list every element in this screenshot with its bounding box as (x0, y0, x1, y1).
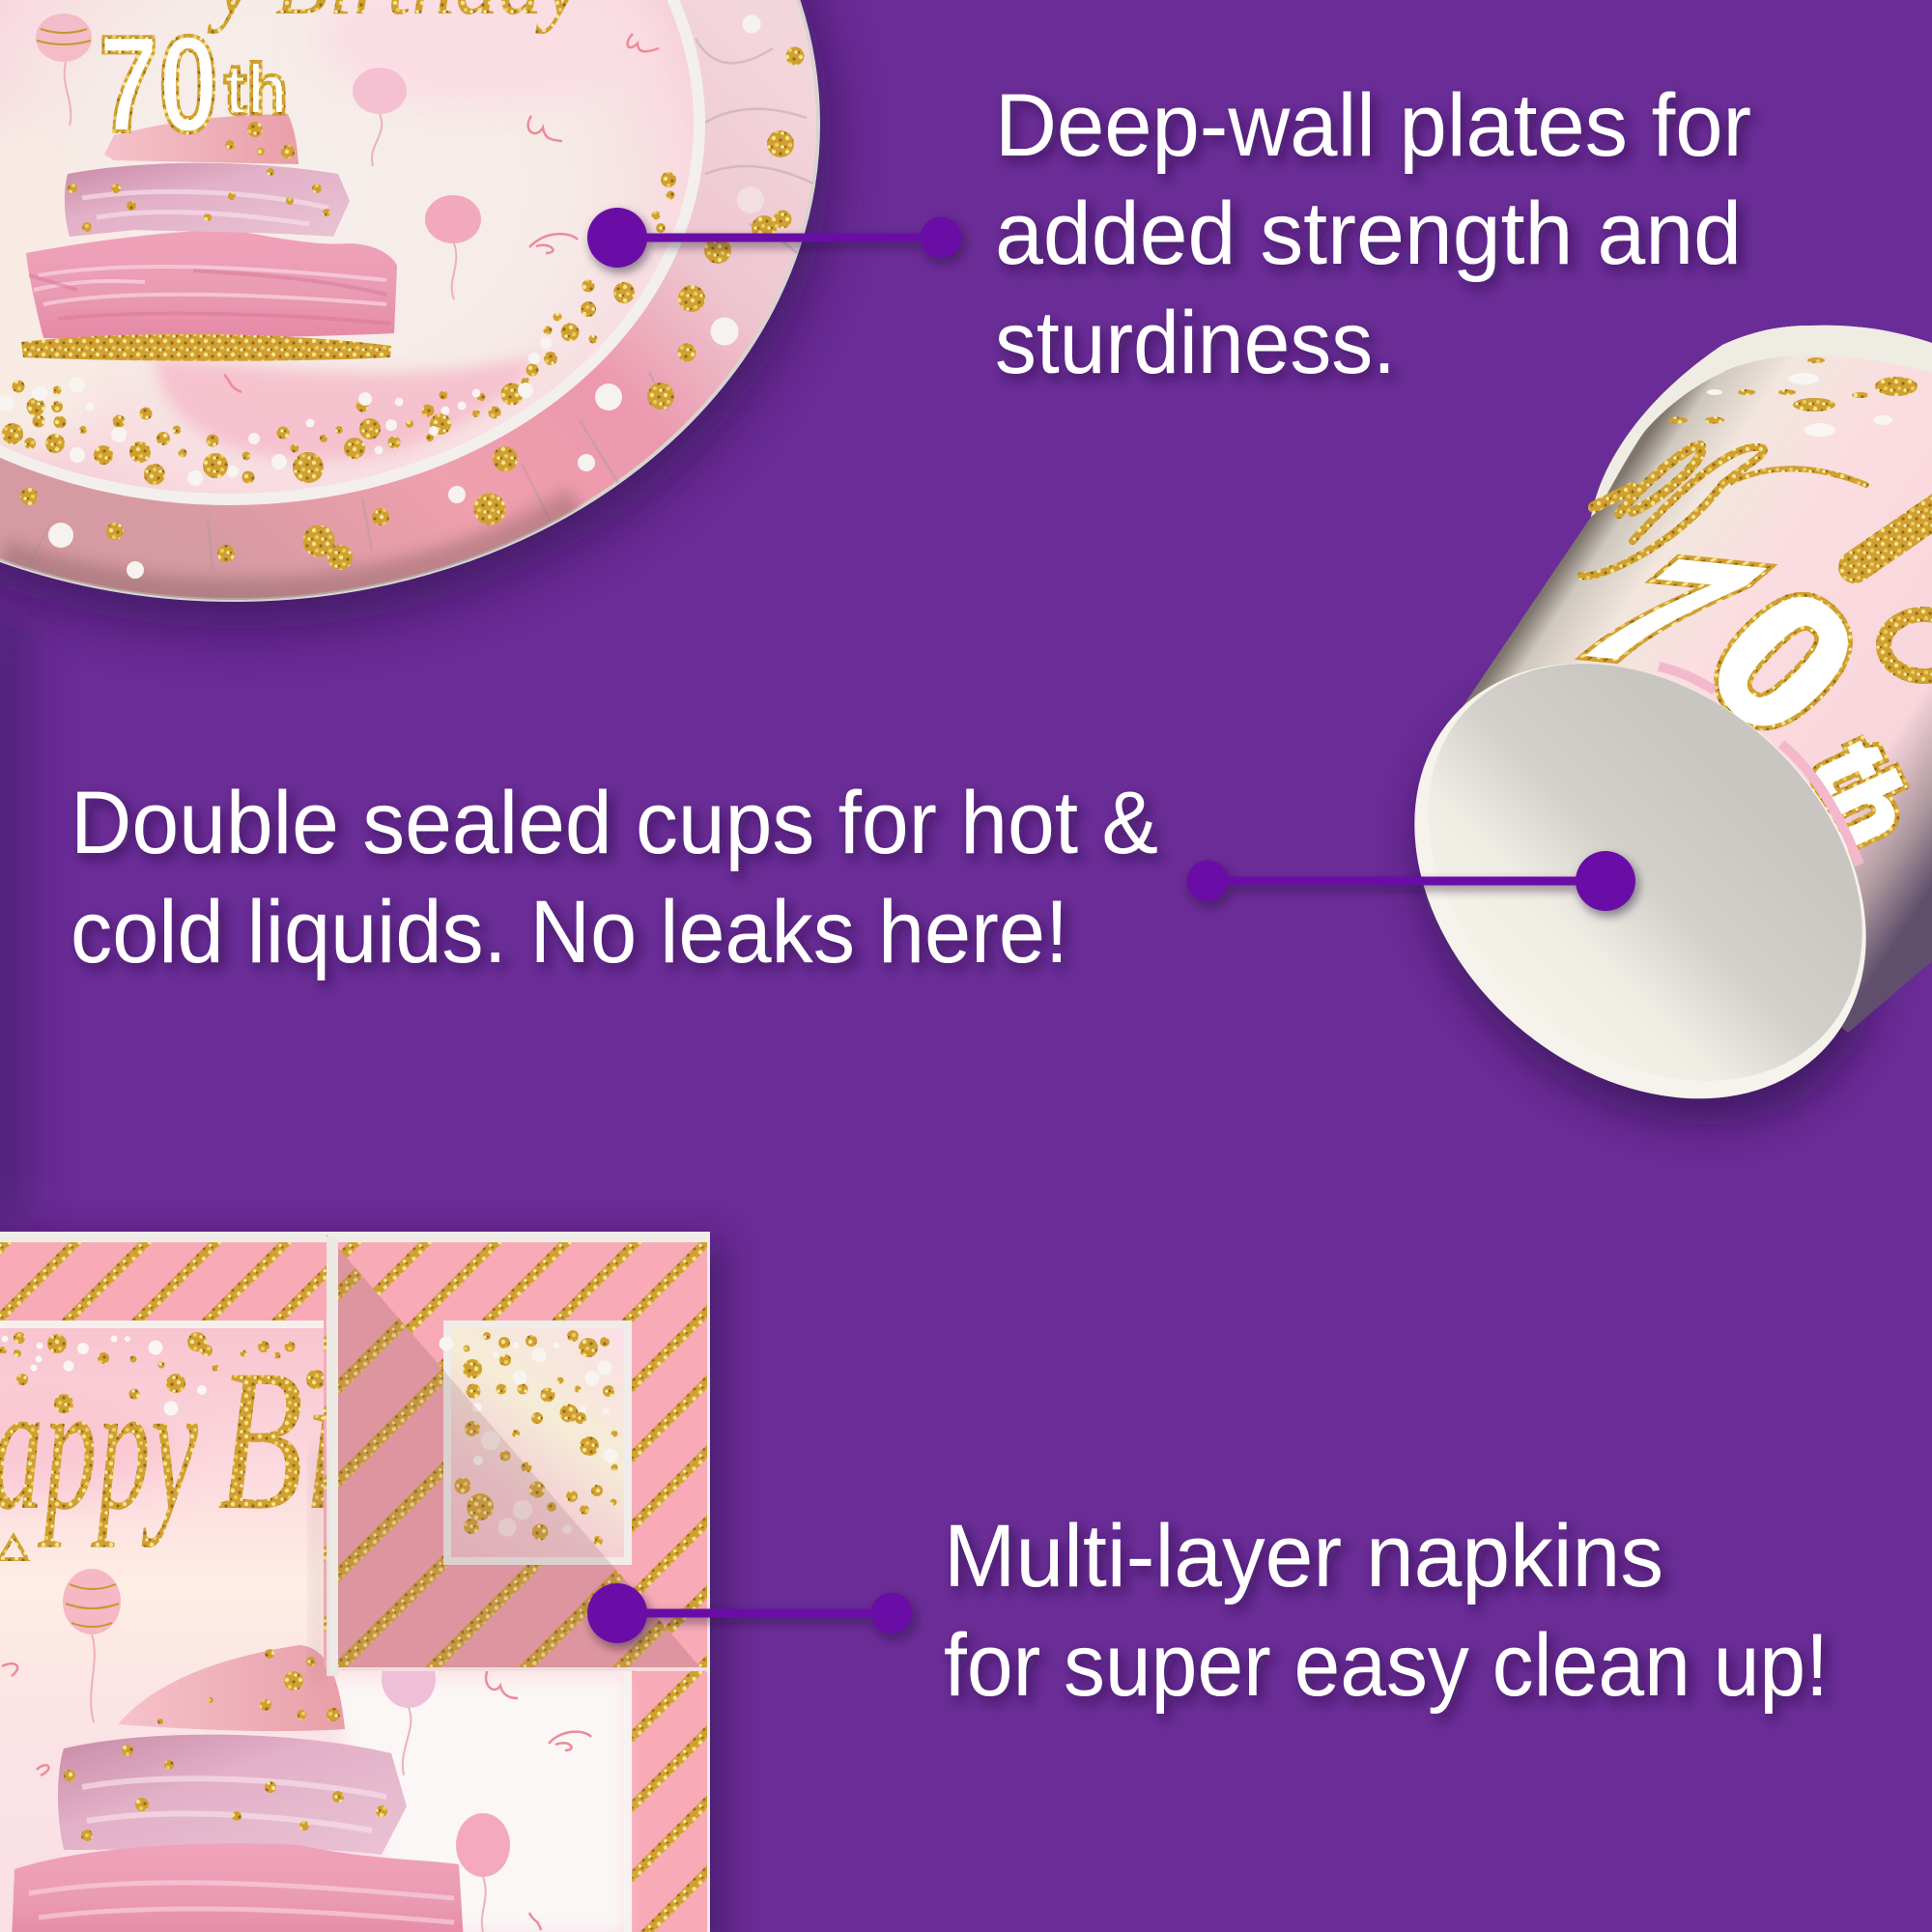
flap cast shadow (311, 1449, 325, 1681)
cake middle tier (65, 163, 350, 237)
flap gold dots (454, 1330, 618, 1546)
flap translucent triangle (327, 1235, 700, 1667)
pink sliver behind cup base (1659, 667, 1860, 865)
panel pink tint (0, 1401, 184, 1497)
cup numeral white layer: 0 (1668, 548, 1897, 777)
cake middle tier (58, 1735, 407, 1855)
background left edge shading (0, 618, 29, 1217)
napkin shadow (0, 1241, 720, 1932)
text block: napkins: Multi-layer napkins (944, 1507, 1663, 1605)
text block: plates: Deep-wall plates for (995, 76, 1751, 175)
cup numeral white layer: th (1791, 727, 1932, 861)
balloons (63, 1569, 510, 1932)
text block: cups: Double sealed cups for hot & (71, 774, 1158, 872)
text block: napkins: for super easy clean up! (944, 1616, 1829, 1715)
cake gold flecks (64, 1649, 387, 1841)
plate well (0, 0, 694, 494)
cup script lettering (1581, 445, 1932, 676)
flap white left edge (327, 1236, 338, 1676)
callout: plate connector (587, 208, 962, 268)
rim lower shading (0, 507, 580, 600)
rim white dots (48, 15, 764, 579)
inner white ring (0, 0, 705, 505)
plate shadow (0, 0, 831, 628)
napkin striped border (0, 1242, 707, 1932)
number: 70th on cup (1534, 534, 1932, 861)
balloons (36, 14, 481, 299)
cake top tier (104, 114, 298, 164)
panel: paper cup (1327, 326, 1932, 1188)
cake top tier (118, 1645, 345, 1731)
cup numeral outline layer: th (1791, 727, 1932, 861)
panel: paper plate (0, 0, 818, 600)
cup numeral white layer: 7 (1534, 534, 1801, 689)
streamers (2, 1663, 591, 1930)
cake bottom tier (26, 230, 397, 339)
cup numeral outline layer: 0 (1668, 548, 1897, 777)
cup shadow (1329, 591, 1932, 1215)
cup numeral outline layer (1534, 534, 1932, 861)
flap white dots (439, 1337, 618, 1536)
flap bottom edge (338, 1667, 707, 1671)
number: 70th on plate: th (224, 49, 288, 129)
flap panel (324, 1235, 714, 1676)
text block: plates (995, 76, 1751, 392)
confetti gold row (0, 1332, 326, 1413)
cup base outer (1327, 574, 1932, 1188)
flap underside stripes (327, 1235, 714, 1667)
panel: napkin (0, 1232, 714, 1932)
cup numeral white layer (1534, 534, 1932, 861)
confetti white row (2, 1335, 207, 1416)
number: 70th on plate: 70 (99, 8, 218, 161)
rim wrinkles (29, 39, 813, 570)
well gold confetti dots (2, 172, 676, 485)
well white confetti dots (0, 337, 552, 486)
inner panel white glow (324, 1681, 624, 1932)
well pink tint (0, 0, 647, 461)
text block: cups (71, 774, 1158, 981)
cup base inner (1345, 579, 1932, 1166)
rim gold dots (20, 46, 804, 570)
cup numeral outline layer: 7 (1534, 534, 1801, 689)
cake base glitter (21, 334, 391, 361)
text block: napkins (944, 1507, 1829, 1715)
flap upper area (324, 1242, 707, 1667)
plate rim (0, 0, 818, 600)
napkin white edge (0, 1232, 710, 1932)
cup white confetti (1707, 373, 1892, 437)
cup body (1456, 326, 1932, 1033)
cake gold flecks (68, 122, 330, 232)
cup rim (1591, 326, 1932, 517)
callout: cup connector (1186, 851, 1635, 911)
script text: happy birthday: appy (0, 1346, 198, 1548)
cake bottom tier (12, 1843, 464, 1932)
script text: happy birthday: Bi (217, 1328, 343, 1552)
text block: plates: sturdiness. (995, 294, 1396, 392)
text block: plates: added strength and (995, 185, 1742, 283)
confetti streamers (224, 34, 659, 392)
flap window (447, 1324, 628, 1561)
napkin inner panel (0, 1324, 628, 1932)
callout: napkin connector (587, 1583, 912, 1643)
text block: cups: cold liquids. No leaks here! (71, 883, 1068, 981)
cup gold confetti (1668, 357, 1918, 423)
gold triangle (0, 1536, 27, 1559)
